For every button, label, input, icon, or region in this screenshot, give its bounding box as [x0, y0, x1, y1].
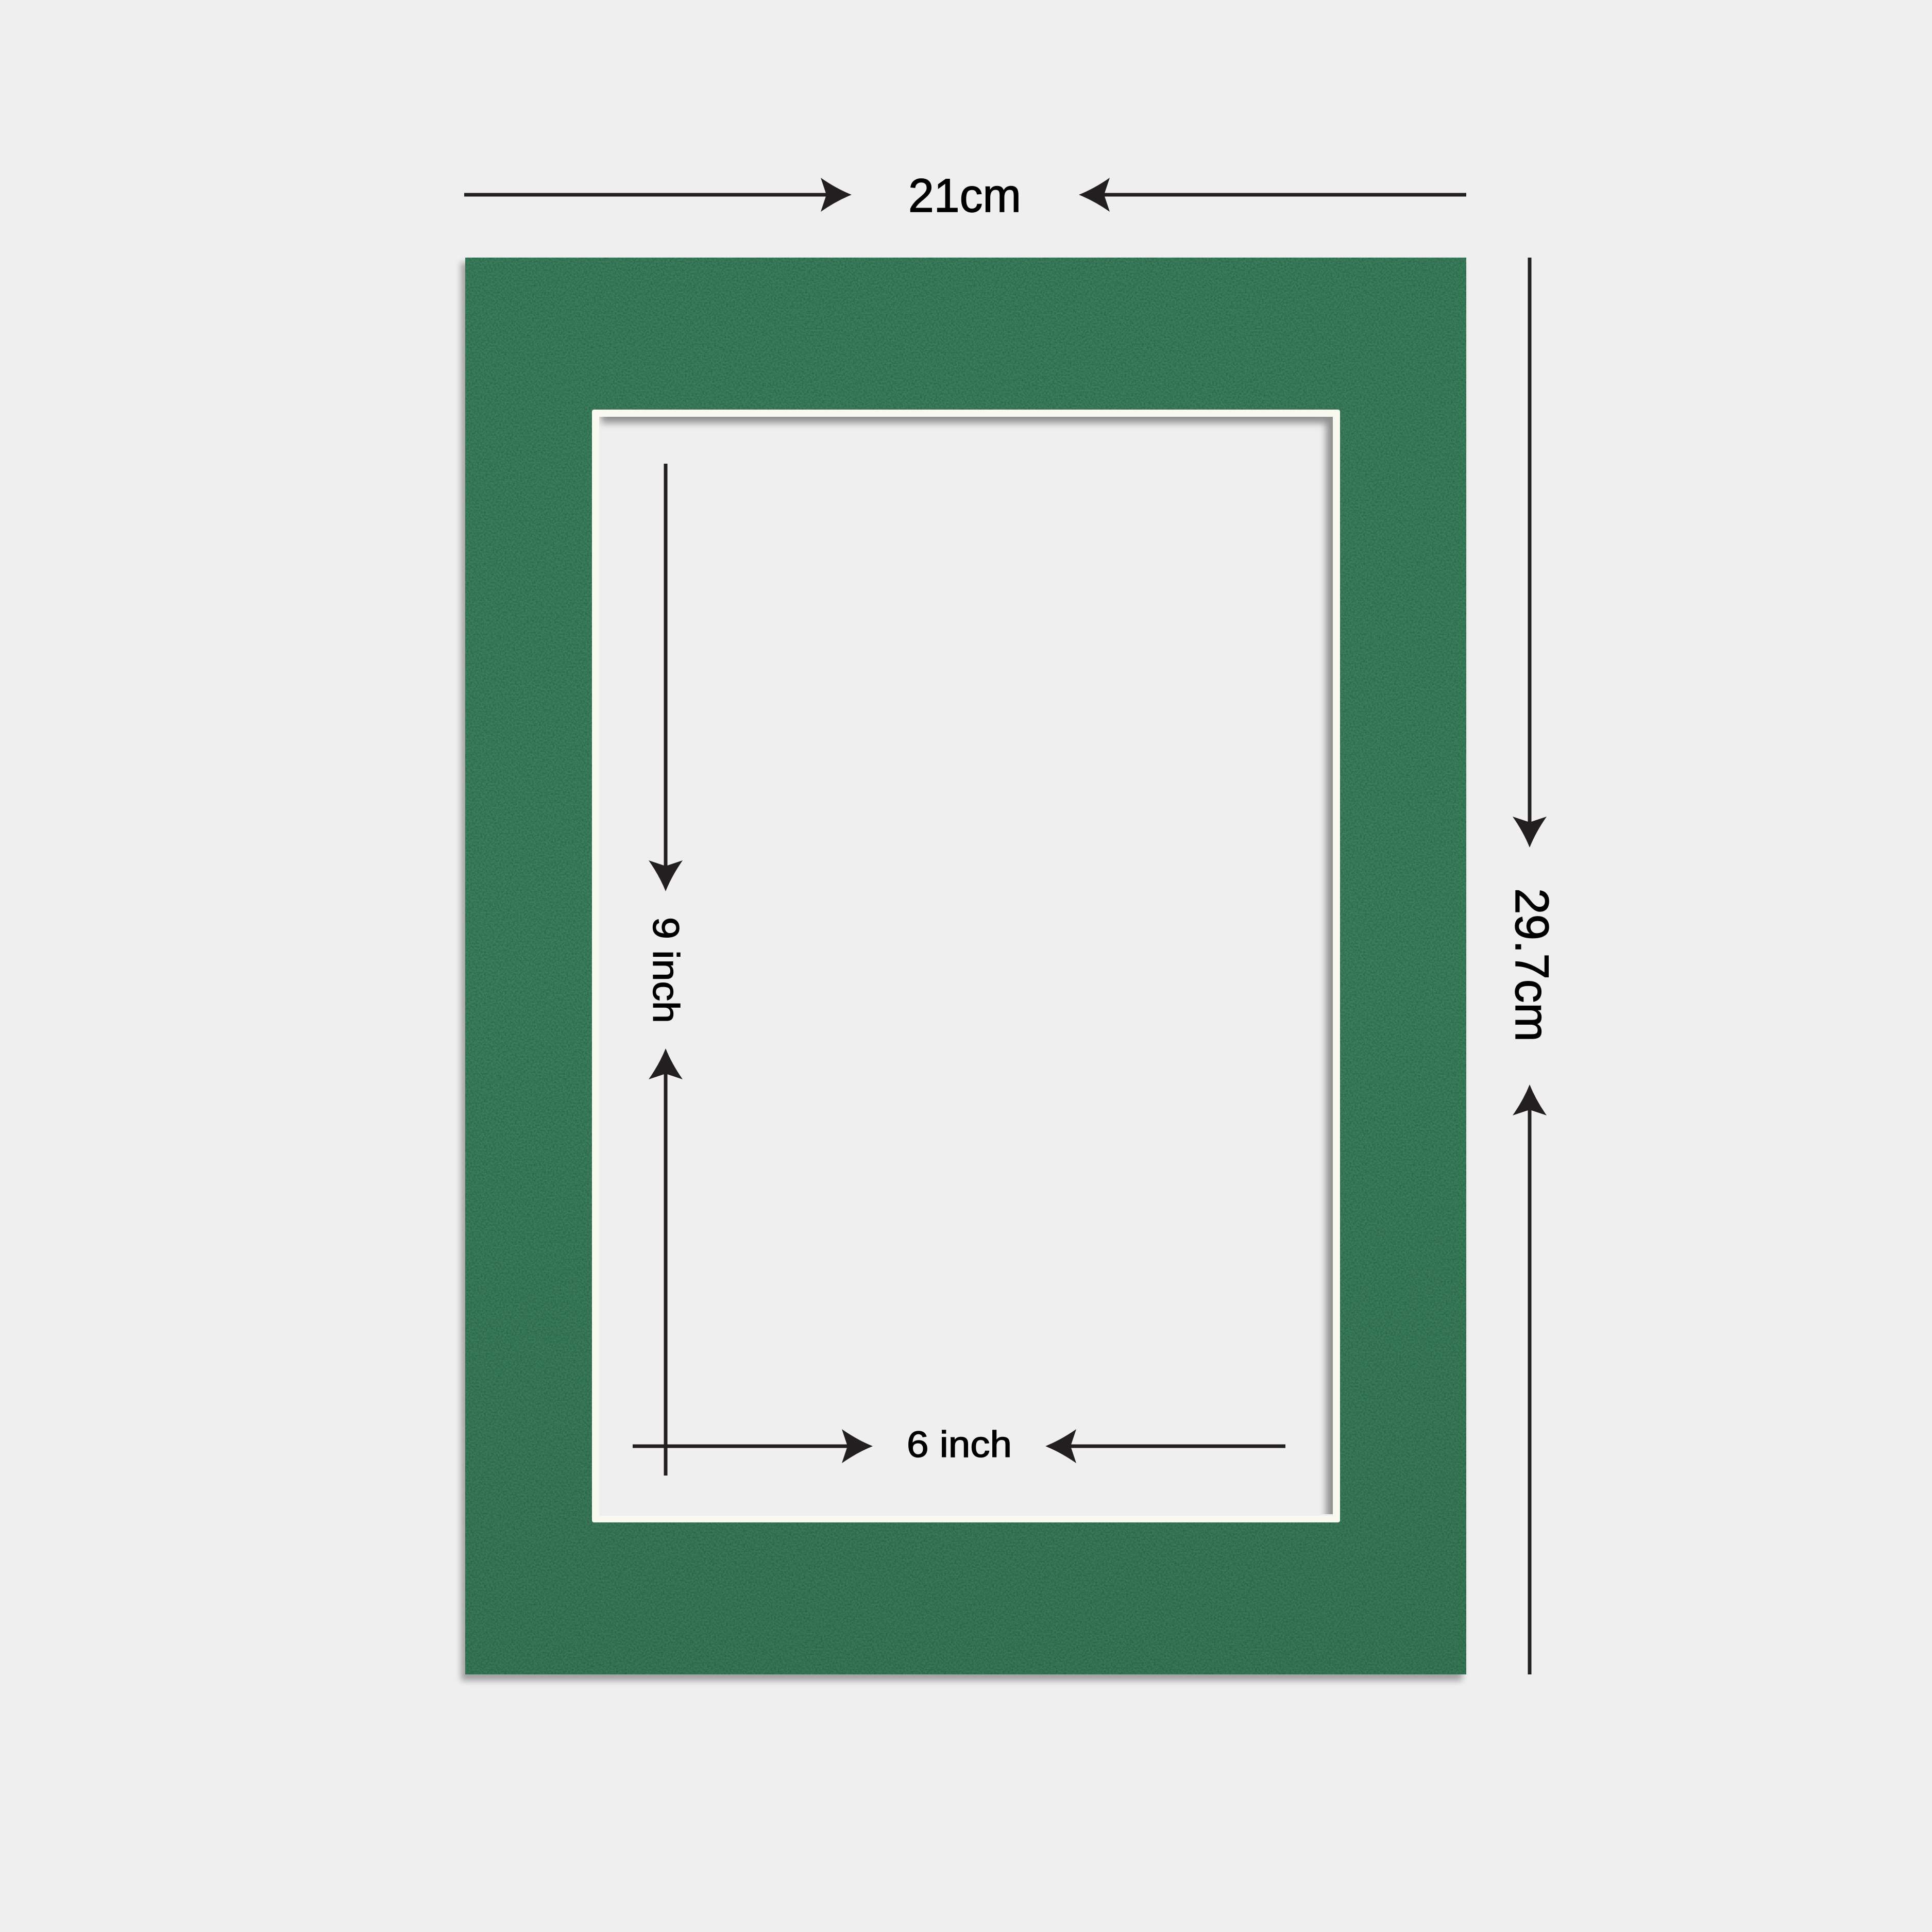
arrow: inner height top	[649, 464, 683, 891]
panel: green mat board	[465, 258, 1466, 1674]
mat board shadow	[461, 263, 1462, 1681]
right height dimension: 29.7cm	[1505, 258, 1558, 1674]
inner height dimension: 9 inch	[645, 464, 686, 1476]
mat board paper texture	[465, 258, 1466, 1674]
arrow: height bottom	[1513, 1084, 1547, 1674]
arrow: inner width right	[1045, 1429, 1285, 1463]
arrow: height top	[1513, 258, 1547, 848]
mat opening interior	[599, 417, 1333, 1516]
mat board surface	[465, 258, 1466, 1674]
label: 9 inch: 9 inch	[645, 917, 686, 1023]
arrow: width right	[1079, 178, 1466, 212]
arrow: width left	[464, 178, 852, 212]
arrow: inner height bottom	[649, 1048, 683, 1476]
label: 6 inch: 6 inch	[907, 1425, 1012, 1465]
inner width dimension: 6 inch	[633, 1425, 1285, 1465]
top width dimension: 21cm	[464, 170, 1466, 222]
label: 21cm: 21cm	[908, 170, 1021, 222]
infographic canvas	[457, 178, 1549, 1685]
label: 29.7cm: 29.7cm	[1505, 888, 1558, 1042]
arrow: inner width left	[633, 1429, 873, 1463]
mat opening inner shadow	[601, 397, 1350, 1522]
mat opening cream bevel	[592, 410, 1340, 1522]
